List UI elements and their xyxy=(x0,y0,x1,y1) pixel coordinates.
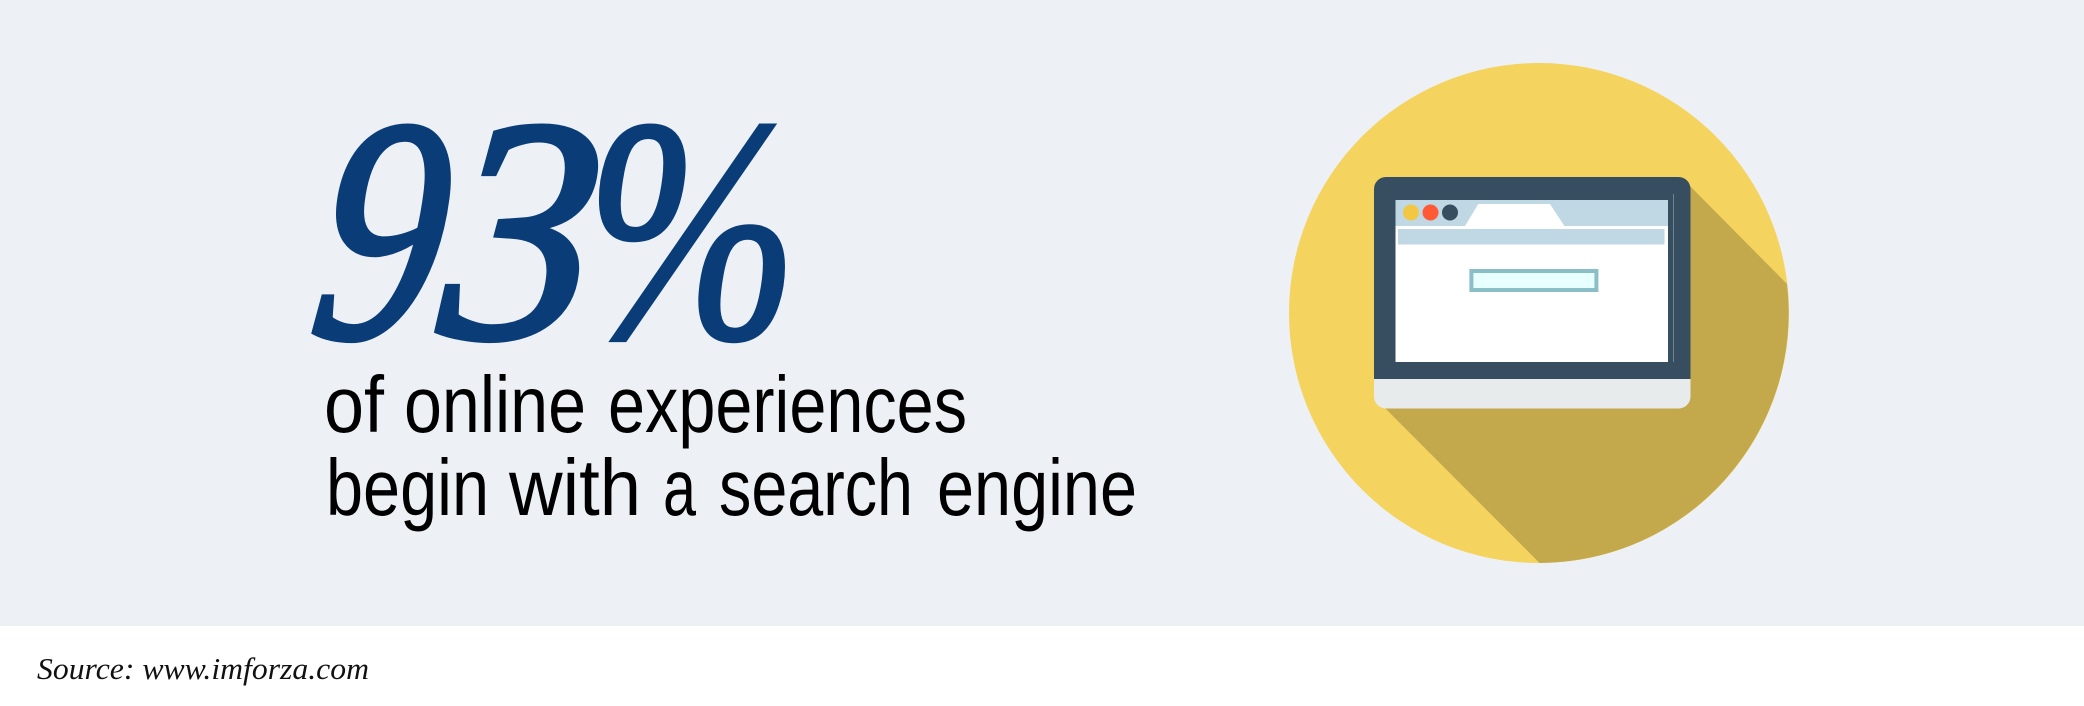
long shadow xyxy=(1385,184,1789,563)
heading: 93%: 9 xyxy=(297,54,470,406)
address bar xyxy=(1398,229,1664,244)
text block: description xyxy=(324,360,1137,532)
text block: description: experiences xyxy=(608,360,967,449)
icon: laptop in yellow circle xyxy=(1289,63,1789,563)
heading: 93%: % xyxy=(586,54,798,407)
laptop base xyxy=(1374,379,1690,408)
text block: description: with xyxy=(508,443,641,532)
heading: 93% xyxy=(297,54,798,407)
laptop screen frame xyxy=(1374,177,1690,379)
source note: Source: www.imforza.com xyxy=(37,651,369,686)
window dot: red xyxy=(1422,204,1438,220)
text block: description: of xyxy=(324,360,385,449)
active tab xyxy=(1465,204,1564,229)
icon background circle xyxy=(1289,63,1789,563)
window dot: navy xyxy=(1442,204,1458,220)
text block: description: engine xyxy=(937,443,1137,532)
heading: 93%: 3 xyxy=(425,55,618,407)
text block: description: online xyxy=(404,360,586,449)
text block: description: a xyxy=(663,443,696,532)
window dot: yellow xyxy=(1403,204,1419,220)
frame highlight xyxy=(1673,194,1674,362)
text block: description: search xyxy=(719,443,913,532)
search box xyxy=(1471,271,1596,290)
browser tab strip xyxy=(1396,200,1668,226)
text block: description: begin xyxy=(326,443,489,532)
browser window xyxy=(1396,200,1668,362)
